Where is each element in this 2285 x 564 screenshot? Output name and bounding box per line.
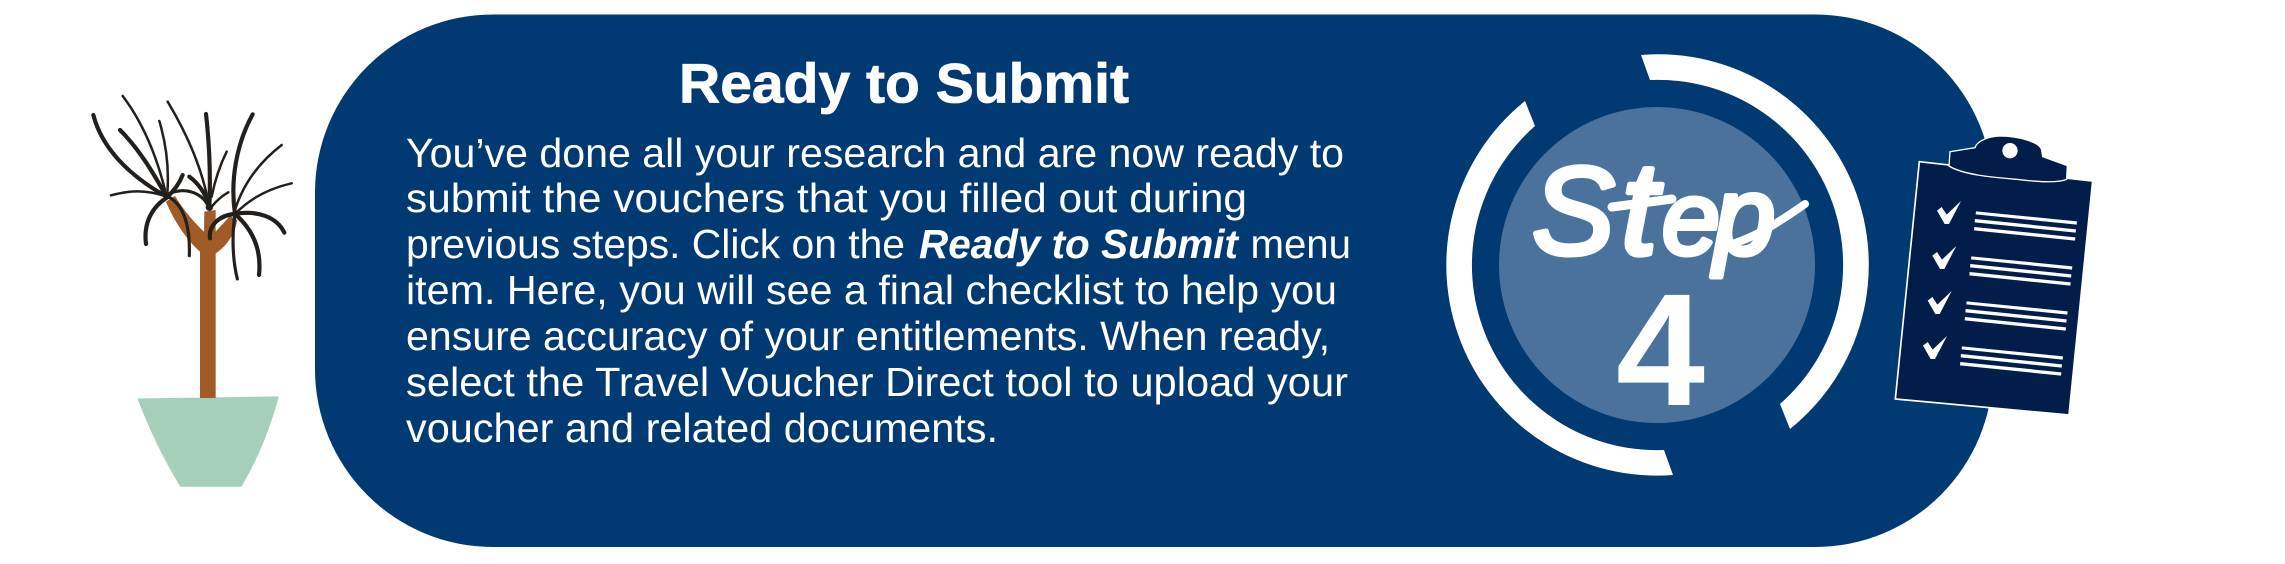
checklist row 3 — [1928, 291, 2068, 331]
text block: instructions: ensure accuracy of your entitlements. When ready, — [406, 313, 1330, 359]
icon: clipboard checklist — [1895, 136, 2093, 415]
clipboard clip — [1949, 136, 2067, 182]
clipboard hole — [2002, 143, 2018, 158]
clipboard board — [1895, 162, 2093, 415]
panel: navy rounded banner — [315, 14, 1993, 547]
text block: instructions — [406, 130, 1351, 451]
text block: instructions: menu — [1250, 221, 1351, 267]
plant leaves — [93, 96, 292, 279]
text block: instructions: select the Travel Voucher Direct tool to upload your — [406, 359, 1348, 405]
text block: instructions: Ready to Submit — [919, 221, 1240, 267]
checklist row 2 — [1932, 246, 2072, 286]
checklist row 4 — [1923, 336, 2063, 376]
badge ring lower left arc — [1446, 101, 1673, 476]
text block: instructions: submit the vouchers that you filled out during — [406, 175, 1247, 221]
text block: instructions: voucher and related documents. — [406, 405, 998, 451]
plant pot — [138, 396, 279, 487]
step word with brush swashes: S — [1532, 143, 1615, 281]
step number: 4 — [1616, 260, 1705, 439]
icon: potted plant — [93, 96, 292, 487]
badge ring upper right arc — [1641, 54, 1869, 429]
badge inner circle — [1499, 107, 1815, 423]
plant trunk and leaves — [93, 96, 292, 398]
plant trunk and branches — [166, 196, 237, 398]
step word with brush swashes: e — [1662, 161, 1720, 277]
text block: instructions: item. Here, you will see a final checklist to help you — [406, 267, 1337, 313]
step word with brush swashes: t — [1621, 135, 1663, 282]
title: Ready to Submit — [679, 52, 1129, 114]
text block: instructions: You’ve done all your research and are now ready to — [406, 130, 1344, 176]
text block: instructions: previous steps. Click on the — [406, 221, 905, 267]
step badge — [1446, 54, 1869, 476]
step word with brush swashes — [1532, 135, 1805, 282]
checklist row 1 — [1937, 201, 2077, 241]
step word with brush swashes: p — [1711, 155, 1775, 278]
